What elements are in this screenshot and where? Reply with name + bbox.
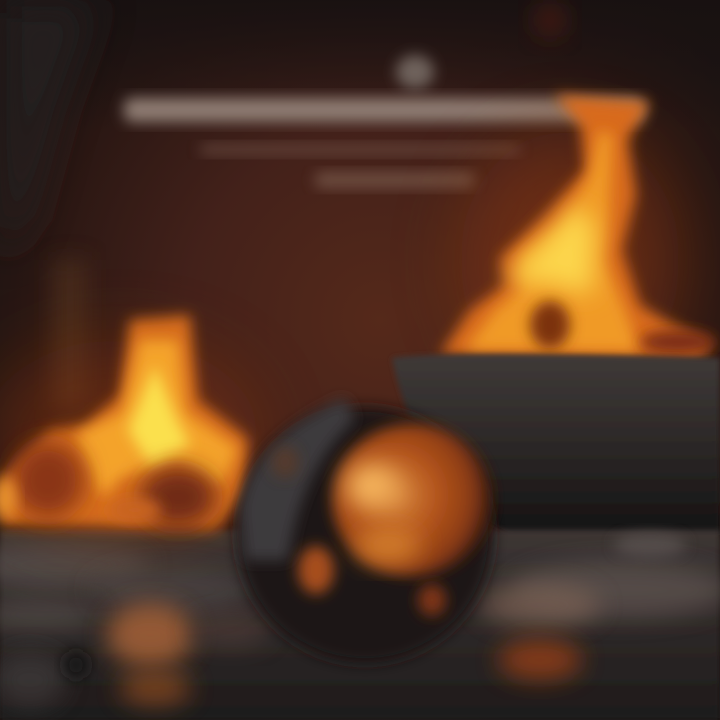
cauldron bowl xyxy=(392,354,720,535)
ground xyxy=(0,530,720,720)
subtitle second line xyxy=(315,172,475,188)
lantern left shell xyxy=(240,398,355,560)
subtitle line xyxy=(200,144,520,155)
round lantern xyxy=(237,398,493,663)
right flame xyxy=(440,95,716,390)
title block xyxy=(124,55,644,188)
heading bar xyxy=(124,98,644,122)
lantern glowing window xyxy=(332,424,492,576)
icon: title emblem xyxy=(396,55,434,89)
lantern small holes xyxy=(298,546,334,594)
left flame xyxy=(0,315,260,540)
